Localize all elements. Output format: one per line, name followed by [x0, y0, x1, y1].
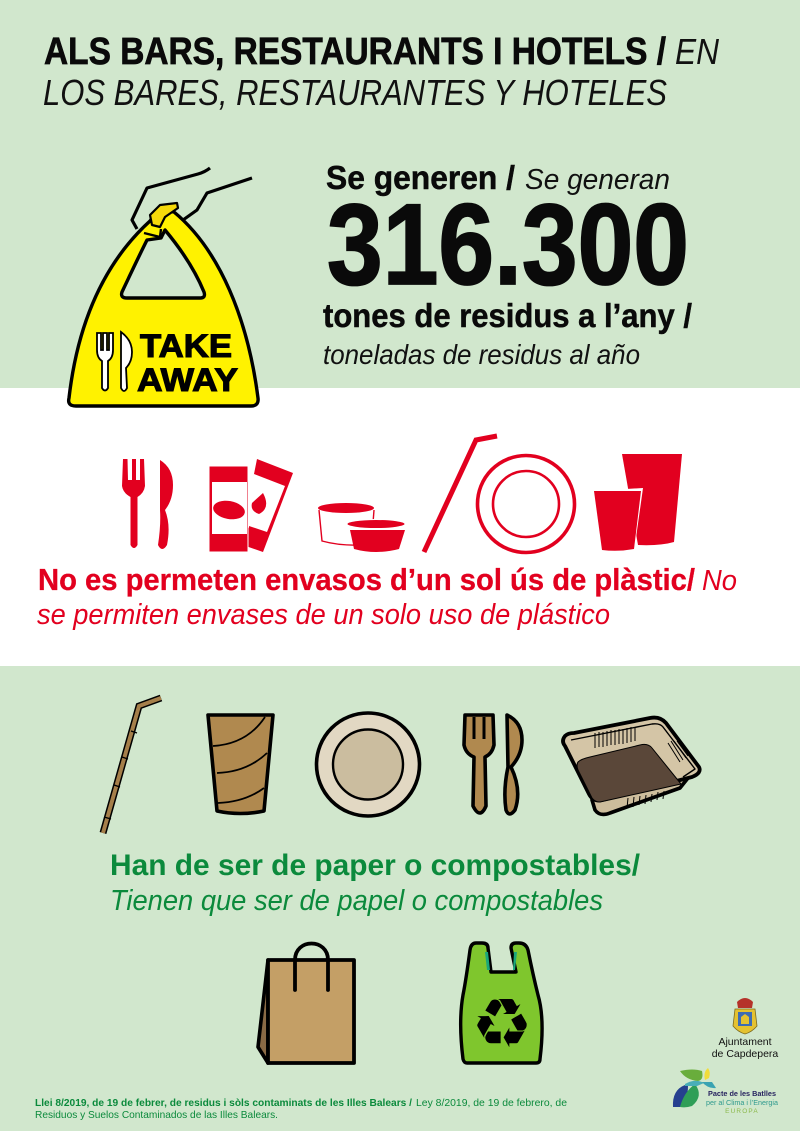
logo: Pacte de les Batlles: [673, 1068, 779, 1115]
icon: wooden fork and knife: [464, 715, 522, 814]
icon: plastic knife: [158, 460, 173, 549]
logo: Ajuntament de Capdepera: [712, 998, 778, 1060]
logo: Ajuntament de Capdepera: Ajuntament: [718, 1036, 772, 1048]
title: [43, 31, 720, 113]
icon: compostable green bag: [461, 943, 542, 1064]
icon: compostable plate: [316, 713, 420, 816]
recycling symbol: ♻: [472, 985, 532, 1064]
red message: se permiten envases de un solo uso de plástico: [37, 599, 610, 631]
icon: compostable food tray: [563, 718, 700, 814]
red message: No es permeten envasos d’un sol ús de plàstic/: [38, 562, 695, 597]
fork and knife: [97, 333, 113, 390]
legal footnote: [35, 1098, 567, 1121]
legal footnote: Llei 8/2019, de 19 de febrer, de residus i sòls contaminats de les Illes Balears /: [35, 1098, 412, 1109]
legal footnote: Ley 8/2019, de 19 de febrero, de: [416, 1098, 567, 1109]
icon: plastic fork: [122, 459, 145, 548]
icon: plastic plate: [478, 456, 574, 552]
icon: paper straw: [103, 698, 161, 833]
number: 316.300: [327, 181, 689, 309]
logo: Pacte de les Batlles: Pacte de les Batlles: [708, 1089, 776, 1098]
icon: paper bag: [258, 944, 354, 1063]
headline statistic: [323, 159, 692, 370]
icon: paper cup: [208, 715, 273, 814]
headline statistic: toneladas de residus al año: [323, 339, 640, 370]
green message: [110, 849, 641, 917]
red message: [37, 562, 737, 631]
panel: white plastic ban band: [0, 388, 800, 666]
title: ALS BARS, RESTAURANTS I HOTELS /: [44, 31, 666, 73]
bag label: TAKE: [140, 328, 232, 364]
title: EN: [675, 31, 720, 72]
title: LOS BARES, RESTAURANTES Y HOTELES: [43, 72, 667, 113]
icon: take away bag held by hand: [69, 168, 258, 406]
headline statistic: tones de residus a l’any /: [323, 297, 692, 334]
red message: No: [702, 565, 737, 597]
icon: plastic straw: [424, 436, 497, 552]
legal footnote: Residuos y Suelos Contaminados de las Illes Balears.: [35, 1110, 278, 1121]
red plastic icons: [122, 436, 682, 552]
logo: Ajuntament de Capdepera: de Capdepera: [712, 1048, 778, 1060]
fold of the handle: [150, 203, 178, 227]
icon: plastic bowls: [318, 503, 405, 552]
crest: [733, 998, 757, 1034]
icon: plastic cups: [594, 454, 682, 552]
icon: plastic sachets: [209, 459, 293, 552]
logo: Pacte de les Batlles: EUROPA: [725, 1108, 759, 1115]
icon: take away bag held by hand: AWAY: [137, 362, 238, 398]
bag body: [69, 210, 258, 406]
hand: [132, 168, 252, 229]
green message: Han de ser de paper o compostables/: [110, 849, 641, 882]
logo: Pacte de les Batlles: per al Clima i l’Energia: [706, 1098, 779, 1107]
headline statistic: Se generen /: [326, 159, 515, 196]
headline statistic: Se generan: [525, 164, 670, 196]
green message: Tienen que ser de papel o compostables: [110, 885, 603, 917]
